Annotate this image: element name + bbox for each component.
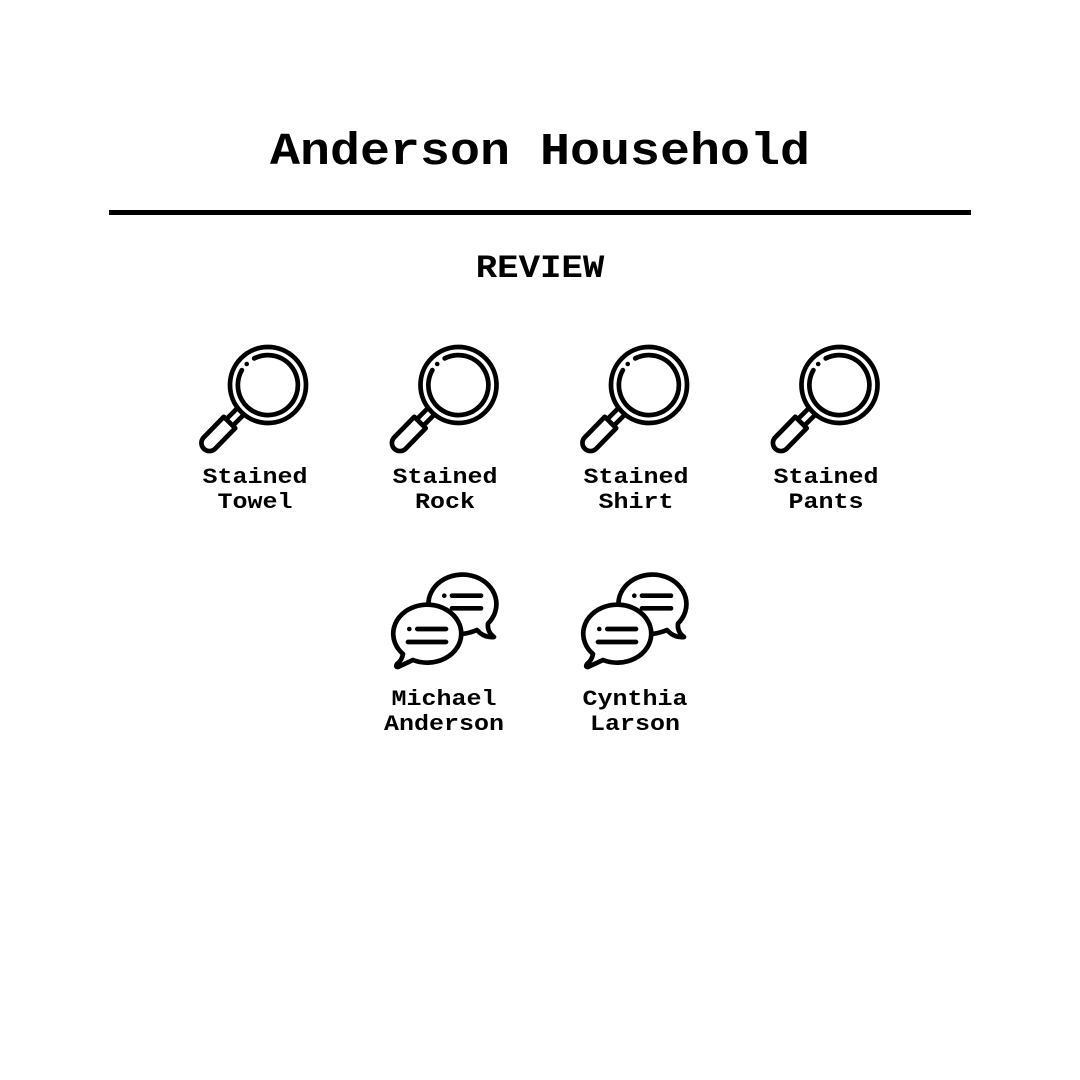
icon: magnifier stained shirt xyxy=(582,347,687,451)
section heading: review: REVIEW xyxy=(476,250,604,287)
label: stained shirt: Shirt xyxy=(598,489,673,515)
label: stained pants: Pants xyxy=(788,489,863,515)
label: stained rock: Rock xyxy=(414,489,474,515)
label: stained shirt: Stained xyxy=(583,464,688,490)
label: michael anderson: Michael xyxy=(391,686,496,712)
icon: speech bubbles michael anderson xyxy=(393,575,496,667)
label: cynthia larson: Larson xyxy=(589,711,679,737)
label: michael anderson: Anderson xyxy=(384,711,504,737)
label: stained pants: Stained xyxy=(773,464,878,490)
label: stained rock xyxy=(392,464,497,515)
label: cynthia larson: Cynthia xyxy=(582,686,687,712)
label: michael anderson xyxy=(384,686,504,737)
label: cynthia larson xyxy=(582,686,687,737)
label: stained towel: Towel xyxy=(217,489,292,515)
icon: magnifier stained rock xyxy=(392,347,496,451)
icon: magnifier stained towel xyxy=(201,347,306,451)
label: stained shirt xyxy=(583,464,688,515)
label: stained rock: Stained xyxy=(392,464,497,490)
label: stained pants xyxy=(773,464,878,515)
title: Anderson Household xyxy=(270,126,810,178)
icon: magnifier stained pants xyxy=(773,347,878,451)
icon: speech bubbles cynthia larson xyxy=(583,575,686,667)
title underline rule xyxy=(109,210,971,215)
label: stained towel xyxy=(202,464,307,515)
label: stained towel: Stained xyxy=(202,464,307,490)
